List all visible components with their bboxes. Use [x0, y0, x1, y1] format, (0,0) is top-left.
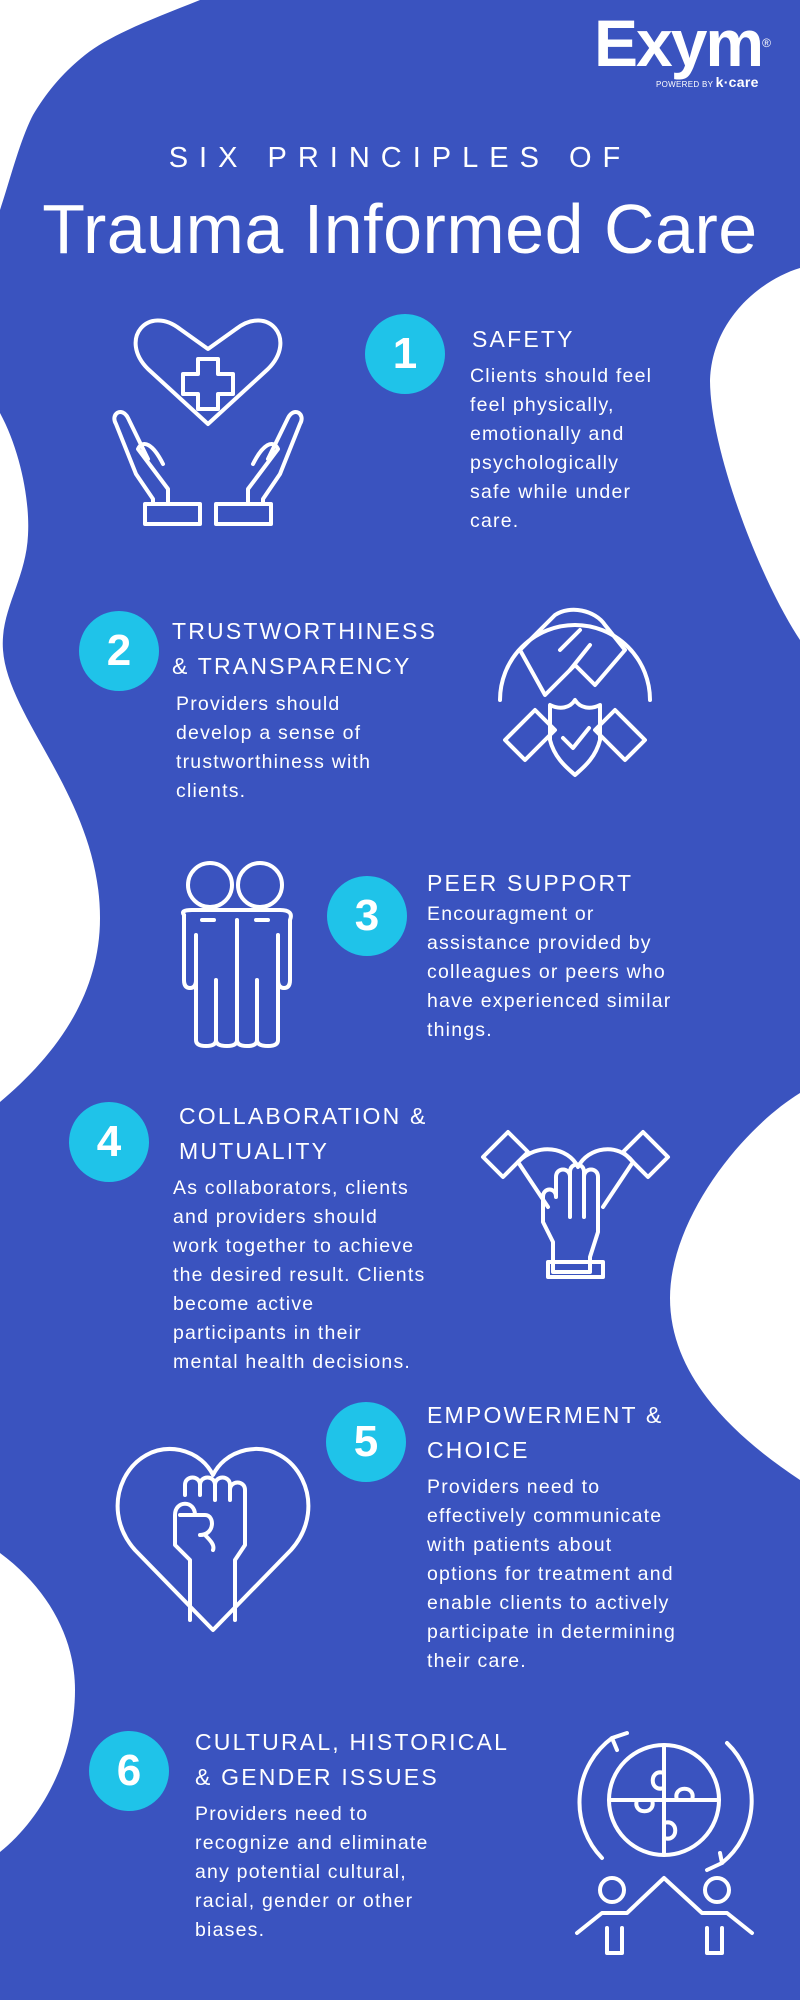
- number 5: [326, 1402, 406, 1482]
- heading: collaboration: [179, 1103, 428, 1164]
- text: empowerment: effectively communicate: [427, 1505, 662, 1527]
- heading: cultural: [195, 1729, 509, 1790]
- number 6: [89, 1731, 169, 1811]
- text: cultural: Providers need to: [195, 1803, 368, 1825]
- heading: peer support: PEER SUPPORT: [427, 870, 633, 896]
- text: collaboration: [173, 1177, 425, 1373]
- icon: heart in hands: [112, 318, 304, 526]
- icon: stacked hands: [480, 1130, 670, 1279]
- text: safety: Clients should feel: [470, 365, 652, 387]
- number 1: [365, 314, 445, 394]
- text: peer support: [427, 903, 672, 1041]
- number 1: 1: [393, 329, 417, 378]
- text: trustworthiness: Providers should: [176, 693, 340, 715]
- text: cultural: [195, 1803, 429, 1941]
- number 3: [327, 876, 407, 956]
- text: cultural: racial, gender or other: [195, 1890, 413, 1912]
- number 2: [79, 611, 159, 691]
- heading: empowerment: [427, 1402, 663, 1463]
- heading: trustworthiness: [172, 618, 437, 679]
- heading: empowerment: CHOICE: [427, 1437, 530, 1463]
- text: trustworthiness: trustworthiness with: [176, 751, 371, 773]
- text: empowerment: with patients about: [427, 1534, 612, 1556]
- text: trustworthiness: develop a sense of: [176, 722, 361, 744]
- text: collaboration: mental health decisions.: [173, 1351, 411, 1373]
- text: cultural: any potential cultural,: [195, 1861, 407, 1883]
- text: safety: emotionally and: [470, 423, 625, 445]
- text: cultural: biases.: [195, 1919, 265, 1941]
- text: safety: care.: [470, 510, 519, 532]
- text: collaboration: As collaborators, clients: [173, 1177, 409, 1199]
- text: collaboration: the desired result. Clients: [173, 1264, 425, 1286]
- text: peer support: have experienced similar: [427, 990, 672, 1012]
- text: cultural: recognize and eliminate: [195, 1832, 429, 1854]
- number 4: 4: [97, 1117, 121, 1166]
- heading: trustworthiness: TRUSTWORTHINESS: [172, 618, 437, 644]
- section 1: safety: [112, 318, 304, 526]
- text: empowerment: their care.: [427, 1650, 527, 1672]
- text: safety: safe while under: [470, 481, 631, 503]
- number 4: [69, 1102, 149, 1182]
- text: trustworthiness: [176, 693, 371, 802]
- heading: empowerment: EMPOWERMENT &: [427, 1402, 663, 1428]
- number 2: 2: [107, 626, 131, 675]
- number 3: 3: [355, 891, 379, 940]
- text: peer support: Encouragment or: [427, 903, 595, 925]
- section 2 icon: handshake: [498, 608, 652, 778]
- logo: POWERED BY k·care: [656, 74, 759, 90]
- heading: cultural: & GENDER ISSUES: [195, 1764, 439, 1790]
- text: collaboration: and providers should: [173, 1206, 378, 1228]
- text: safety: psychologically: [470, 452, 619, 474]
- number 5: 5: [354, 1417, 378, 1466]
- text: safety: [470, 365, 652, 532]
- text: empowerment: participate in determining: [427, 1621, 676, 1643]
- heading: trustworthiness: & TRANSPARENCY: [172, 653, 412, 679]
- text: empowerment: options for treatment and: [427, 1563, 674, 1585]
- number 6: 6: [117, 1746, 141, 1795]
- heading: collaboration: MUTUALITY: [179, 1138, 329, 1164]
- logo: Exym®: [594, 6, 769, 80]
- text: empowerment: enable clients to actively: [427, 1592, 670, 1614]
- heading: cultural: CULTURAL, HISTORICAL: [195, 1729, 509, 1755]
- text: peer support: assistance provided by: [427, 932, 652, 954]
- title: Trauma Informed Care: [42, 190, 758, 268]
- text: trustworthiness: clients.: [176, 780, 246, 802]
- text: peer support: things.: [427, 1019, 493, 1041]
- text: empowerment: Providers need to: [427, 1476, 600, 1498]
- icon: peer support: [181, 861, 293, 1048]
- heading: collaboration: COLLABORATION &: [179, 1103, 428, 1129]
- text: collaboration: participants in their: [173, 1322, 362, 1344]
- icon: fist in heart: [116, 1446, 310, 1632]
- text: collaboration: become active: [173, 1293, 314, 1315]
- text: peer support: colleagues or peers who: [427, 961, 666, 983]
- text: collaboration: work together to achieve: [173, 1235, 414, 1257]
- icon: puzzle globe with people: [574, 1731, 754, 1955]
- heading: safety: SAFETY: [472, 326, 575, 352]
- subtitle: SIX PRINCIPLES OF: [169, 142, 631, 174]
- text: empowerment: [427, 1476, 676, 1672]
- text: safety: feel physically,: [470, 394, 615, 416]
